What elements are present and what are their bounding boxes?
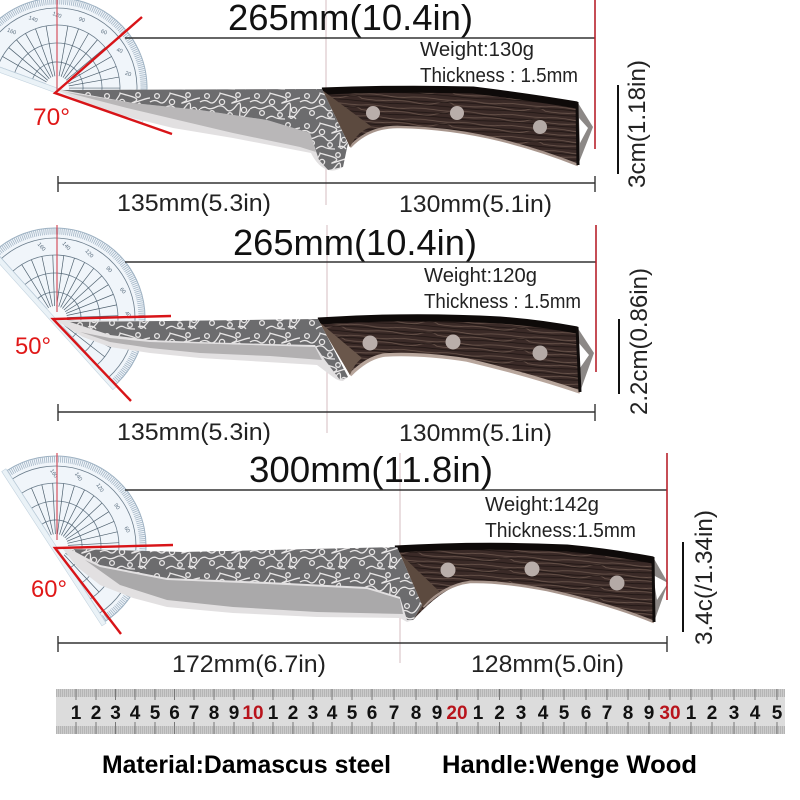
- knife blade: [62, 547, 422, 622]
- ruler: 9: [644, 703, 654, 724]
- angle lines: [53, 316, 171, 401]
- ruler: 1: [268, 703, 279, 724]
- handle length: 130mm(5.1in): [399, 420, 552, 447]
- protractor 70 degree: 160: [6, 28, 17, 36]
- weight and thickness: [424, 264, 581, 313]
- blade length: 172mm(6.7in): [172, 651, 326, 678]
- ruler: 4: [327, 703, 338, 724]
- ruler: 20: [446, 703, 468, 724]
- total length heading: 300mm(11.8in): [249, 449, 493, 490]
- protractor 50 degree: 20: [120, 335, 128, 344]
- ruler: 6: [581, 703, 591, 724]
- angle label: 70°: [33, 104, 70, 131]
- ruler: 3: [516, 703, 526, 724]
- blade length: 135mm(5.3in): [117, 190, 271, 217]
- angle label: 60°: [31, 576, 67, 603]
- ruler: 2: [91, 703, 101, 724]
- width label: 2.2cm(0.86in): [626, 268, 653, 415]
- blade-handle guide line: [399, 453, 401, 663]
- bottom dimension line: [58, 176, 595, 192]
- ruler: 5: [772, 703, 783, 724]
- ruler: 2: [707, 703, 717, 724]
- protractor 60 degree: 60: [122, 526, 131, 534]
- protractor 70 degree: 140: [28, 15, 38, 24]
- protractor 70 degree: [0, 0, 174, 124]
- angle lines: [55, 17, 172, 134]
- handle label: Handle:Wenge Wood: [442, 751, 697, 779]
- material label: Material:Damascus steel: [102, 751, 391, 779]
- ruler: [56, 689, 785, 734]
- ruler: 30: [659, 703, 681, 724]
- protractor 60 degree: 140: [73, 471, 83, 482]
- ruler: 3: [729, 703, 739, 724]
- protractor 70 degree: 120: [51, 11, 62, 20]
- weight and thickness: Weight:142g: [485, 493, 599, 516]
- protractor 50 degree: 90: [104, 266, 113, 274]
- ruler: 8: [623, 703, 633, 724]
- width label: 3.4c(/1.34in): [691, 510, 718, 645]
- ruler: 5: [347, 703, 358, 724]
- protractor vertical: [56, 0, 58, 90]
- blade-handle guide line: [326, 225, 328, 433]
- angle label: 50°: [15, 333, 51, 360]
- protractor 50 degree: 140: [61, 241, 71, 252]
- bottom dimension line: [58, 636, 667, 652]
- ruler: 7: [189, 703, 199, 724]
- ruler: 4: [750, 703, 761, 724]
- ruler: 8: [209, 703, 219, 724]
- total length line: [125, 37, 595, 39]
- ruler: 5: [150, 703, 161, 724]
- protractor 60 degree: 120: [94, 483, 104, 493]
- handle length: 130mm(5.1in): [399, 191, 552, 218]
- handle length: 128mm(5.0in): [471, 651, 624, 678]
- knife 1 section: [0, 0, 651, 218]
- protractor 70 degree: 40: [115, 47, 123, 55]
- width label: 3cm(1.18in): [624, 60, 651, 188]
- protractor 50 degree: 160: [36, 242, 46, 253]
- knife 3 section: [2, 420, 718, 678]
- ruler: 2: [288, 703, 298, 724]
- ruler: 3: [308, 703, 318, 724]
- protractor vertical: [56, 453, 58, 540]
- ruler: 3: [110, 703, 121, 724]
- protractor 70 degree: 20: [124, 71, 132, 78]
- ruler: 7: [389, 703, 399, 724]
- end marker: [595, 225, 597, 372]
- protractor 60 degree: 90: [112, 503, 121, 511]
- angle lines: [55, 545, 173, 634]
- weight and thickness: [485, 493, 636, 542]
- end marker: [594, 0, 596, 149]
- width bar: [618, 319, 620, 394]
- knife handle: [318, 315, 594, 392]
- weight and thickness: [420, 38, 578, 87]
- protractor 70 degree: 60: [100, 29, 108, 37]
- ruler: 5: [559, 703, 570, 724]
- protractor 70 degree: 90: [78, 16, 86, 24]
- total length line: [125, 261, 596, 263]
- knife blade: [57, 89, 348, 171]
- ruler: 10: [242, 703, 264, 724]
- ruler: 4: [130, 703, 141, 724]
- ruler: 8: [411, 703, 421, 724]
- protractor 60 degree: 40: [124, 550, 132, 558]
- width bar: [682, 542, 684, 632]
- ruler: 1: [71, 703, 82, 724]
- ruler: 7: [602, 703, 612, 724]
- protractor 50 degree: [0, 189, 183, 390]
- ruler: 9: [229, 703, 239, 724]
- knife blade: [55, 319, 348, 381]
- weight and thickness: Weight:130g: [420, 38, 534, 61]
- width bar: [617, 85, 619, 174]
- protractor vertical: [56, 225, 58, 312]
- protractor 50 degree: 60: [118, 287, 127, 295]
- ruler: 9: [432, 703, 442, 724]
- total length line: [125, 489, 667, 491]
- knife 2 section: [0, 189, 653, 447]
- protractor 50 degree: 120: [84, 248, 94, 259]
- protractor 60 degree: [2, 420, 182, 626]
- knife handle: [395, 543, 668, 622]
- weight and thickness: Thickness:1.5mm: [485, 519, 636, 542]
- ruler: 6: [169, 703, 180, 724]
- protractor 60 degree: 20: [117, 574, 125, 582]
- ruler: 1: [473, 703, 484, 724]
- ruler: 2: [494, 703, 505, 724]
- protractor 60 degree: 160: [48, 468, 58, 479]
- total length heading: 265mm(10.4in): [233, 222, 477, 263]
- blade-handle guide line: [325, 0, 327, 205]
- weight and thickness: Thickness : 1.5mm: [420, 64, 578, 87]
- weight and thickness: Weight:120g: [424, 264, 537, 287]
- ruler: 6: [367, 703, 377, 724]
- blade length: 135mm(5.3in): [117, 419, 271, 446]
- protractor 50 degree: 40: [123, 310, 132, 319]
- knife handle: [322, 86, 593, 165]
- weight and thickness: Thickness : 1.5mm: [424, 290, 581, 313]
- ruler: 4: [538, 703, 549, 724]
- bottom dimension line: [58, 404, 595, 421]
- end marker: [666, 453, 668, 600]
- ruler: 1: [686, 703, 697, 724]
